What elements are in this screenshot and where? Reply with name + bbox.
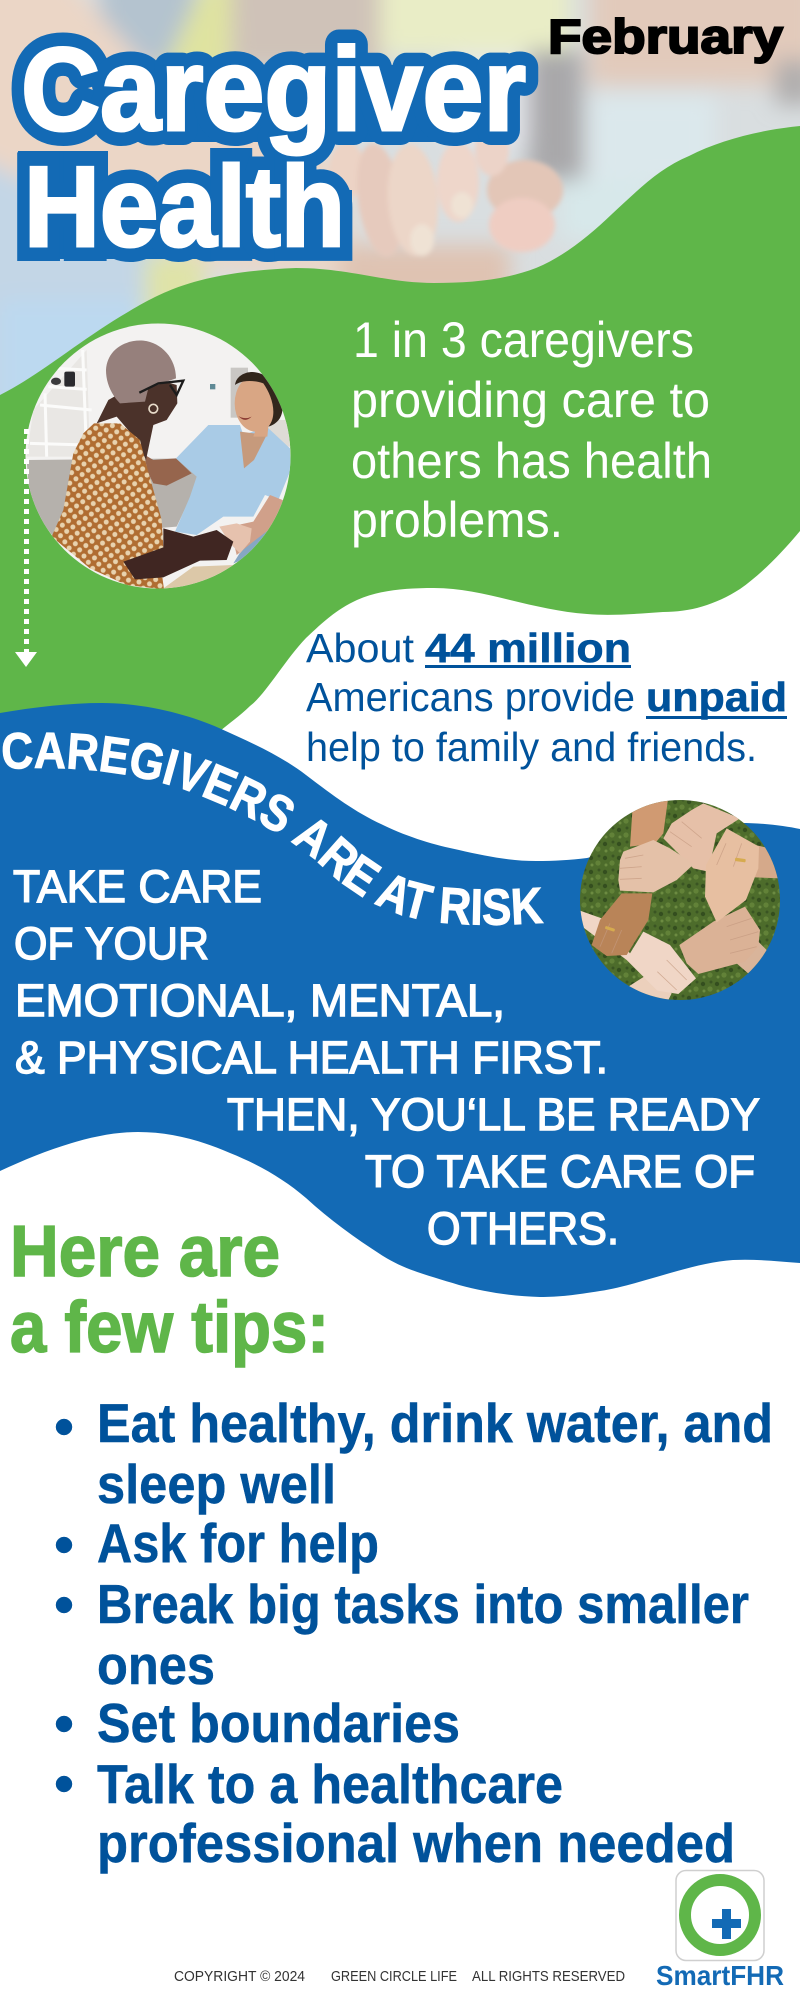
photo: ring of linked hands	[580, 797, 780, 1003]
statistic: 1 in 3 caregivers: providing care to	[351, 372, 710, 428]
photo: caregiver talking with older woman	[25, 323, 293, 590]
call to action text: OF YOUR	[14, 918, 209, 969]
tips list: Talk to a healthcare	[97, 1753, 563, 1815]
title: Caregiver	[21, 24, 526, 156]
hand: pale upper right	[663, 803, 740, 872]
statistic: 44 million Americans: help to family and friends.	[306, 724, 757, 770]
title: Health	[24, 144, 345, 271]
title: Caregiver	[21, 24, 526, 156]
hand: upper left	[618, 840, 694, 892]
tips list	[56, 1392, 773, 1874]
call to action text: THEN, YOU‘LL BE READY	[227, 1089, 760, 1140]
top tan arm	[630, 797, 668, 847]
call to action text: & PHYSICAL HEALTH FIRST.	[15, 1032, 608, 1083]
tips heading: Here are	[10, 1212, 280, 1292]
statistic: 44 million Americans	[306, 625, 787, 770]
older hand lower right	[679, 907, 760, 974]
tips heading	[10, 1212, 329, 1368]
tips list: Ask for help	[97, 1512, 379, 1574]
lower right wrist	[737, 940, 770, 975]
logo: SmartFHR	[656, 1870, 784, 1991]
statistic: 1 in 3 caregivers	[351, 312, 712, 548]
background photo: blurred holding hands	[0, 0, 800, 395]
tips heading: a few tips:	[10, 1288, 329, 1368]
statistic: 1 in 3 caregivers: others has health	[351, 433, 712, 489]
tips list: ones	[97, 1634, 215, 1696]
tan hand	[592, 893, 652, 956]
statistic: 44 million Americans: Americans provide	[306, 674, 635, 720]
call to action text: EMOTIONAL, MENTAL,	[15, 975, 505, 1026]
copyright footer: ALL RIGHTS RESERVED	[472, 1969, 625, 1985]
month label: February	[548, 11, 783, 64]
copyright footer: GREEN CIRCLE LIFE	[331, 1969, 457, 1985]
statistic: 44 million Americans: 44 million	[425, 625, 631, 671]
statistic: 1 in 3 caregivers: 1 in 3 caregivers	[353, 312, 694, 368]
tips list: Set boundaries	[97, 1692, 460, 1754]
statistic: 1 in 3 caregivers: problems.	[351, 492, 563, 548]
call to action text: OTHERS.	[427, 1203, 619, 1254]
blue wave panel	[0, 703, 800, 1297]
logo: SmartFHR: SmartFHR	[656, 1960, 784, 1991]
copyright footer	[174, 1969, 625, 1985]
hand with ring right	[705, 828, 759, 922]
right arm	[755, 845, 780, 878]
bottom stub arm	[629, 977, 672, 1000]
copyright footer: COPYRIGHT © 2024	[174, 1969, 305, 1985]
dotted arrow	[15, 429, 37, 667]
curved heading: CAREGIVERS ARE AT RISK	[2, 732, 544, 926]
green wave panel	[0, 126, 800, 732]
tips list: professional when needed	[97, 1812, 735, 1874]
statistic: 44 million Americans: About	[306, 625, 415, 671]
pale arm and hand	[580, 911, 696, 994]
call to action text	[13, 861, 760, 1254]
statistic: 44 million Americans: unpaid	[646, 674, 787, 720]
call to action text: TAKE CARE	[13, 861, 262, 912]
title: Health	[24, 144, 345, 271]
tips list: sleep well	[97, 1453, 336, 1515]
call to action text: TO TAKE CARE OF	[365, 1146, 755, 1197]
title	[18, 24, 526, 271]
